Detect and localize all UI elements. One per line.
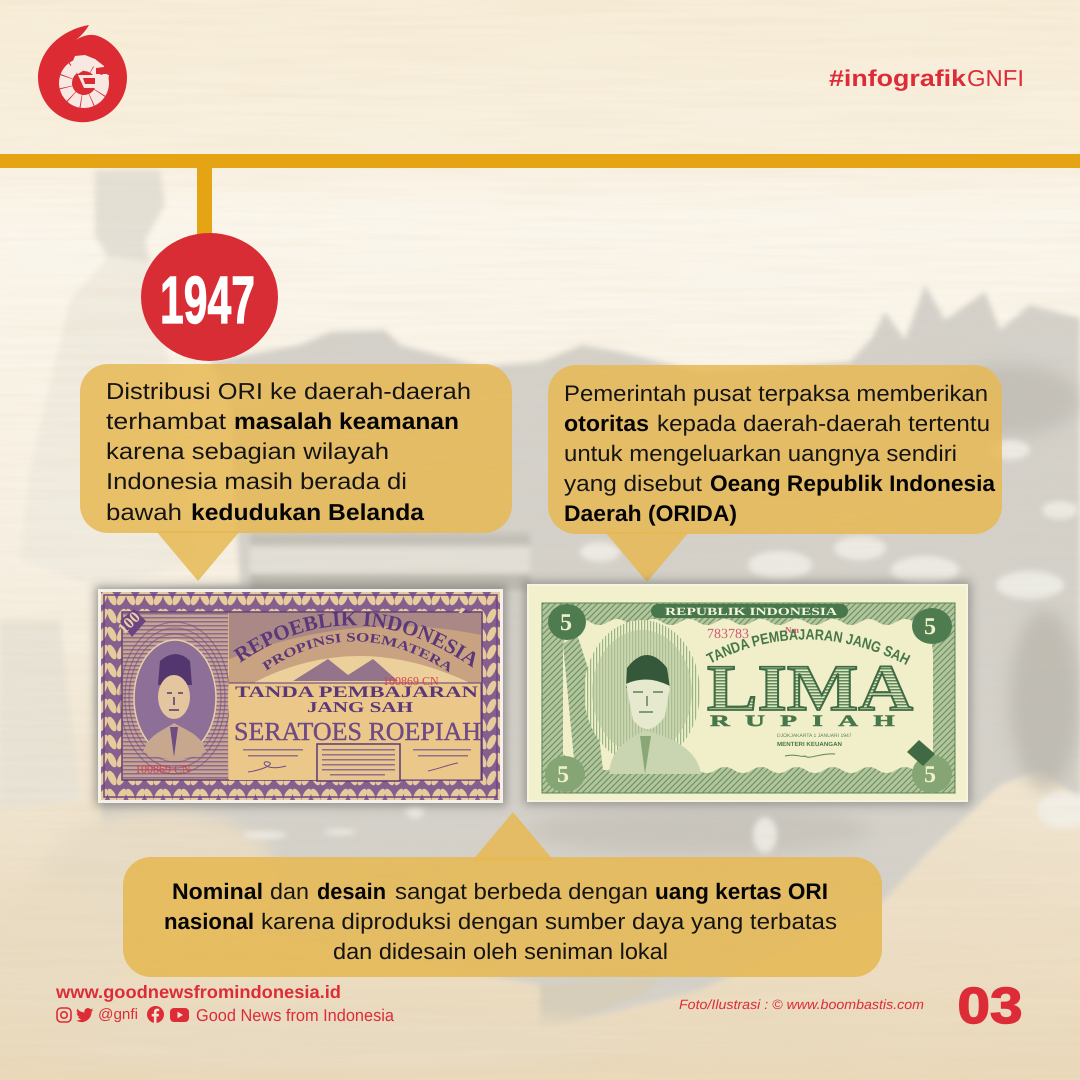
callout: nominal and design: [123, 857, 882, 977]
callout: security problem: terhambat: [106, 408, 227, 434]
hashtag: infografikGNFI: #infografik: [829, 65, 966, 91]
banknote: lima rupiah: REPUBLIK INDONESIA: [665, 606, 837, 618]
callout: nominal and design: nasional: [164, 909, 254, 934]
callout: nominal and design: karena diproduksi dengan sumber daya yang terbatas: [261, 909, 837, 934]
callout: nominal and design: desain: [317, 879, 386, 904]
callout: ORIDA authority: [548, 365, 1002, 534]
callout: nominal and design: dan: [270, 879, 309, 904]
timeline horizontal bar: [0, 154, 1080, 168]
pointer: left bubble: [156, 531, 240, 581]
banknote: 100 roepiah Sumatra: [98, 589, 503, 803]
callout: ORIDA authority: otoritas: [564, 411, 649, 436]
banknote: 100 roepiah Sumatra: 100869 CN: [135, 762, 191, 776]
hashtag: infografikGNFI: [829, 65, 1024, 91]
callout: security problem: bawah: [106, 499, 182, 525]
banknote: lima rupiah: TANDA PEMBAJARAN JANG SAH: [706, 629, 910, 665]
photo credit: Foto/Ilustrasi : © www.boombastis.com: [679, 997, 924, 1012]
year badge: 1947: [141, 233, 278, 361]
callout: security problem: karena sebagian wilayah: [106, 438, 389, 464]
callout: ORIDA authority: kepada daerah-daerah tertentu: [657, 411, 990, 436]
callout: security problem: Indonesia masih berada di: [106, 468, 407, 494]
banknote: lima rupiah: Nm: [785, 625, 799, 635]
callout: ORIDA authority: untuk mengeluarkan uangnya sendiri: [564, 441, 957, 466]
timeline stem: [197, 168, 212, 238]
banknote: 100 roepiah Sumatra: 100869 CN: [383, 674, 439, 688]
banknote: 100 roepiah Sumatra: TANDA PEMBAJARAN: [235, 684, 479, 701]
callout: nominal and design: uang kertas ORI: [655, 879, 828, 904]
callout: security problem: Distribusi ORI ke daerah-daerah: [106, 378, 471, 404]
social name: Good News from Indonesia: [196, 1006, 395, 1025]
callout: security problem: kedudukan Belanda: [191, 499, 424, 525]
logo: red GNFI six mark: [38, 25, 127, 122]
pointer: right bubble: [605, 532, 689, 582]
callout: security problem: [80, 364, 512, 533]
banknote: 100 roepiah Sumatra: SERATOES ROEPIAH: [234, 717, 481, 746]
banknote: lima rupiah: 5: [924, 762, 936, 788]
callout: ORIDA authority: Pemerintah pusat terpaksa memberikan: [564, 381, 988, 406]
banknote: 100 roepiah Sumatra: PROPINSI SOEMATERA: [262, 632, 450, 672]
pointer: bottom bubble: [472, 812, 554, 861]
banknote: 100 roepiah Sumatra: 100: [115, 609, 144, 638]
callout: nominal and design: sangat berbeda dengan: [395, 879, 648, 904]
callout: security problem: masalah keamanan: [234, 408, 459, 434]
banknote: lima rupiah: [527, 584, 968, 802]
footer: website and social links: [55, 982, 395, 1025]
banknote: lima rupiah: MENTERI KEUANGAN: [777, 741, 842, 748]
banknote: 100 roepiah Sumatra: 100: [451, 604, 480, 633]
banknote: lima rupiah: 5: [560, 610, 572, 636]
icon: facebook: [147, 1006, 164, 1023]
banknote: lima rupiah: 5: [924, 614, 936, 640]
hashtag: infografikGNFI: GNFI: [967, 65, 1024, 91]
callout: ORIDA authority: Oeang Republik Indonesia: [710, 471, 995, 496]
callout: nominal and design: Nominal: [172, 879, 263, 904]
callout: ORIDA authority: yang disebut: [564, 471, 703, 496]
icon: instagram: [57, 1008, 71, 1022]
banknote: lima rupiah: LIMA: [707, 652, 913, 725]
callout: nominal and design: dan didesain oleh seniman lokal: [333, 939, 668, 964]
icon: youtube: [170, 1008, 189, 1022]
banknote: 100 roepiah Sumatra: REPOEBLIK INDONESIA: [233, 612, 476, 668]
website url: www.goodnewsfromindonesia.id: [55, 982, 341, 1002]
handle: gnfi: @gnfi: [98, 1006, 138, 1023]
banknote: lima rupiah: DJOKJAKARTA 1 JANUARI 1947: [777, 733, 852, 739]
banknote: lima rupiah: 783783: [707, 627, 749, 642]
banknote: 100 roepiah Sumatra: JANG SAH: [307, 700, 413, 716]
icon: twitter: [76, 1008, 93, 1022]
callout: ORIDA authority: Daerah (ORIDA): [564, 501, 737, 526]
banknote: lima rupiah: 5: [557, 762, 569, 788]
banknote: lima rupiah: RUPIAH: [710, 713, 910, 730]
